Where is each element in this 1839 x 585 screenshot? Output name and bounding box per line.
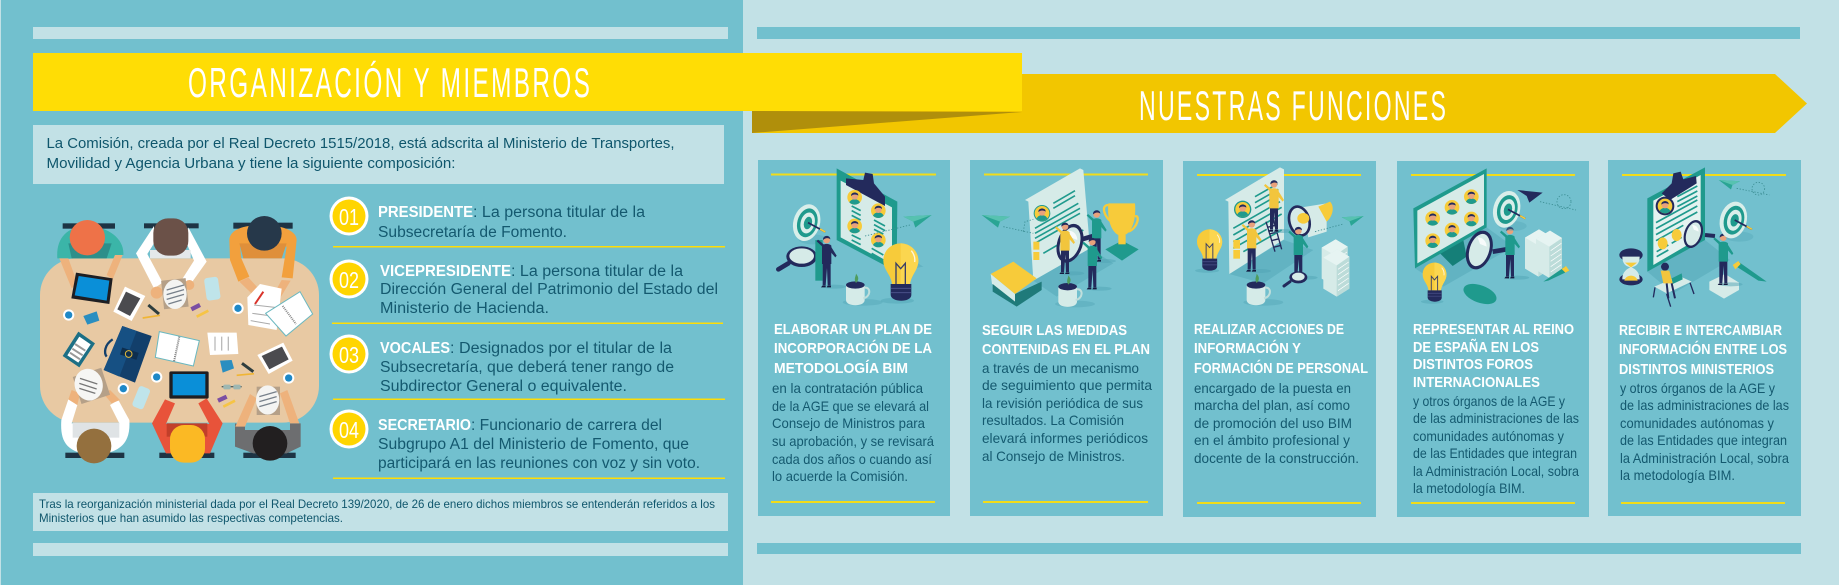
card 5: recibir e intercambiar: [1608, 160, 1801, 516]
card 5: recibir e intercambiar: RECIBIR E INTERCAMBIAR: [1619, 322, 1782, 339]
item 02 vicepresidente: Dirección General del Patrimonio del Estado del: [380, 281, 718, 298]
card 3: realizar acciones: REALIZAR ACCIONES DE: [1194, 321, 1344, 338]
card 2: seguir las medidas: elevará informes periódicos: [982, 430, 1148, 446]
note text box: [33, 493, 728, 531]
item 01 presidente: Subsecretaría de Fomento.: [378, 224, 567, 241]
card 5: recibir e intercambiar: de las Entidades que integran: [1620, 432, 1787, 448]
person top right: [229, 216, 313, 336]
card 1: elaborar un plan: en la contratación pública: [772, 380, 923, 396]
card 1: elaborar un plan: su aprobación, y se revisará: [772, 433, 934, 449]
card 1: elaborar un plan: Consejo de Ministros para: [772, 415, 925, 431]
item 04 secretario: : Funcionario de carrera del: [471, 417, 662, 434]
card 4: representar: DE ESPAÑA EN LOS: [1413, 338, 1539, 356]
card 5: recibir e intercambiar: y otros órganos de la AGE y: [1620, 380, 1775, 396]
card 4: representar: REPRESENTAR AL REINO: [1413, 321, 1574, 338]
intro text box: La Comisión, creada por el Real Decreto 1515/2018, está adscrita al Ministerio de Transportes,: [46, 135, 674, 152]
illustration: resume scene: [982, 168, 1139, 307]
item 01 presidente: : La persona titular de la: [473, 204, 645, 221]
item 04 secretario: Subgrupo A1 del Ministerio de Fomento, que: [378, 436, 689, 453]
banner: organización y miembros: ORGANIZACIÓN Y MIEMBROS: [188, 59, 590, 107]
card 3: realizar acciones: de promoción del uso BIM: [1194, 415, 1352, 431]
card 1: elaborar un plan: cada dos años o cuando así: [772, 451, 932, 467]
desk objects: [63, 273, 294, 410]
card 1: elaborar un plan: ELABORAR UN PLAN DE: [774, 321, 932, 338]
illustration: meeting table: [40, 216, 319, 463]
item 03 vocales: : Designados por el titular de la: [450, 340, 672, 357]
card 4: representar: la Administración Local, sobra: [1413, 463, 1579, 479]
item 02 vicepresidente: : La persona titular de la: [511, 263, 683, 280]
card 2: seguir las medidas: la revisión periódica de sus: [982, 395, 1143, 411]
card 1: elaborar un plan: METODOLOGÍA BIM: [774, 360, 908, 377]
card 5: recibir e intercambiar: la metodología BIM.: [1620, 467, 1735, 483]
item 02 vicepresidente: VICEPRESIDENTE: [380, 263, 511, 280]
card 2: seguir las medidas: resultados. La Comisión: [982, 412, 1124, 428]
card 1: elaborar un plan: [758, 160, 950, 516]
note text box: Ministerios que han asumido las respectivas competencias.: [39, 511, 343, 525]
panel: organización y miembros: [0, 0, 743, 585]
item 01 presidente: PRESIDENTE: [378, 204, 473, 221]
person bottom centre: [152, 371, 223, 463]
person top centre: [136, 218, 207, 309]
item 04 secretario: 04: [339, 417, 359, 443]
card 5: recibir e intercambiar: INFORMACIÓN ENTRE LOS: [1619, 340, 1787, 358]
card 4: representar: la metodología BIM.: [1413, 480, 1525, 496]
card 4: representar: de las Entidades que integran: [1413, 445, 1577, 461]
card 3: realizar acciones: marcha del plan, así como: [1194, 397, 1350, 413]
item 04 secretario: participará en las reuniones con voz y sin voto.: [378, 455, 700, 472]
card 5: recibir e intercambiar: DISTINTOS MINISTERIOS: [1619, 361, 1774, 378]
card 2: seguir las medidas: al Consejo de Ministros.: [982, 448, 1125, 464]
card 3: realizar acciones: FORMACIÓN DE PERSONAL: [1194, 359, 1368, 377]
list: composition: [330, 196, 725, 479]
card 4: representar: INTERNACIONALES: [1413, 374, 1540, 391]
illustration: monitor scene: [1413, 168, 1576, 308]
card 4: representar: DISTINTOS FOROS: [1413, 356, 1533, 373]
bottom bar right: [757, 543, 1801, 554]
card 1: elaborar un plan: lo acuerde la Comisión.: [772, 468, 908, 484]
top bar right: [757, 27, 1800, 39]
card 3: realizar acciones: [1183, 161, 1376, 517]
card 3: realizar acciones: INFORMACIÓN Y: [1194, 339, 1301, 357]
banner: nuestras funciones: [752, 74, 1807, 133]
card 2: seguir las medidas: [970, 160, 1163, 516]
banner: organización y miembros: [33, 53, 1022, 111]
illustration: megaphone scene: [1195, 167, 1364, 306]
card 4: representar: de las administraciones de las: [1413, 410, 1579, 426]
card 2: seguir las medidas: a través de un mecanismo: [982, 360, 1139, 376]
item 02 vicepresidente: 02: [339, 267, 359, 293]
card 5: recibir e intercambiar: comunidades autónomas y: [1620, 415, 1774, 431]
person bottom right: [235, 385, 301, 461]
illustration: clipboard scene: [778, 168, 932, 306]
card 5: recibir e intercambiar: de las administraciones de las: [1620, 397, 1789, 413]
person top left: [57, 220, 123, 288]
item 02 vicepresidente: [330, 260, 723, 324]
intro text box: [33, 125, 724, 184]
item 02 vicepresidente: Ministerio de Hacienda.: [380, 300, 549, 317]
intro text box: Movilidad y Agencia Urbana y tiene la siguiente composición:: [46, 155, 456, 172]
illustration: clipboard and desk scene: [1619, 167, 1769, 307]
item 04 secretario: [330, 410, 725, 479]
item 01 presidente: 01: [339, 204, 359, 230]
card 2: seguir las medidas: SEGUIR LAS MEDIDAS: [982, 322, 1127, 339]
card 3: realizar acciones: en el ámbito profesional y: [1194, 432, 1350, 448]
card 3: realizar acciones: docente de la construcción.: [1194, 450, 1359, 466]
card 1: elaborar un plan: de la AGE que se elevará al: [772, 398, 929, 414]
item 03 vocales: Subsecretaría, que deberá tener rango de: [380, 359, 674, 376]
card 4: representar: y otros órganos de la AGE y: [1413, 393, 1565, 409]
item 03 vocales: [330, 334, 725, 400]
card 4: representar: comunidades autónomas y: [1413, 428, 1564, 444]
banner: nuestras funciones: NUESTRAS FUNCIONES: [1139, 83, 1446, 130]
card 1: elaborar un plan: INCORPORACIÓN DE LA: [774, 339, 932, 357]
card 2: seguir las medidas: de seguimiento que permita: [982, 377, 1152, 393]
card 3: realizar acciones: encargado de la puesta en: [1194, 380, 1351, 396]
card 5: recibir e intercambiar: la Administración Local, sobra: [1620, 450, 1789, 466]
person bottom left: [61, 366, 129, 463]
item 03 vocales: 03: [339, 342, 359, 368]
item 04 secretario: SECRETARIO: [378, 417, 471, 434]
card 4: representar: [1397, 161, 1589, 517]
item 03 vocales: Subdirector General o equivalente.: [380, 378, 627, 395]
item 03 vocales: VOCALES: [380, 340, 450, 357]
note text box: Tras la reorganización ministerial dada por el Real Decreto 139/2020, de 26 de enero dichos miembros se entenderán referidos a los: [39, 497, 715, 511]
item 01 presidente: [330, 196, 725, 248]
card 2: seguir las medidas: CONTENIDAS EN EL PLAN: [982, 341, 1150, 358]
